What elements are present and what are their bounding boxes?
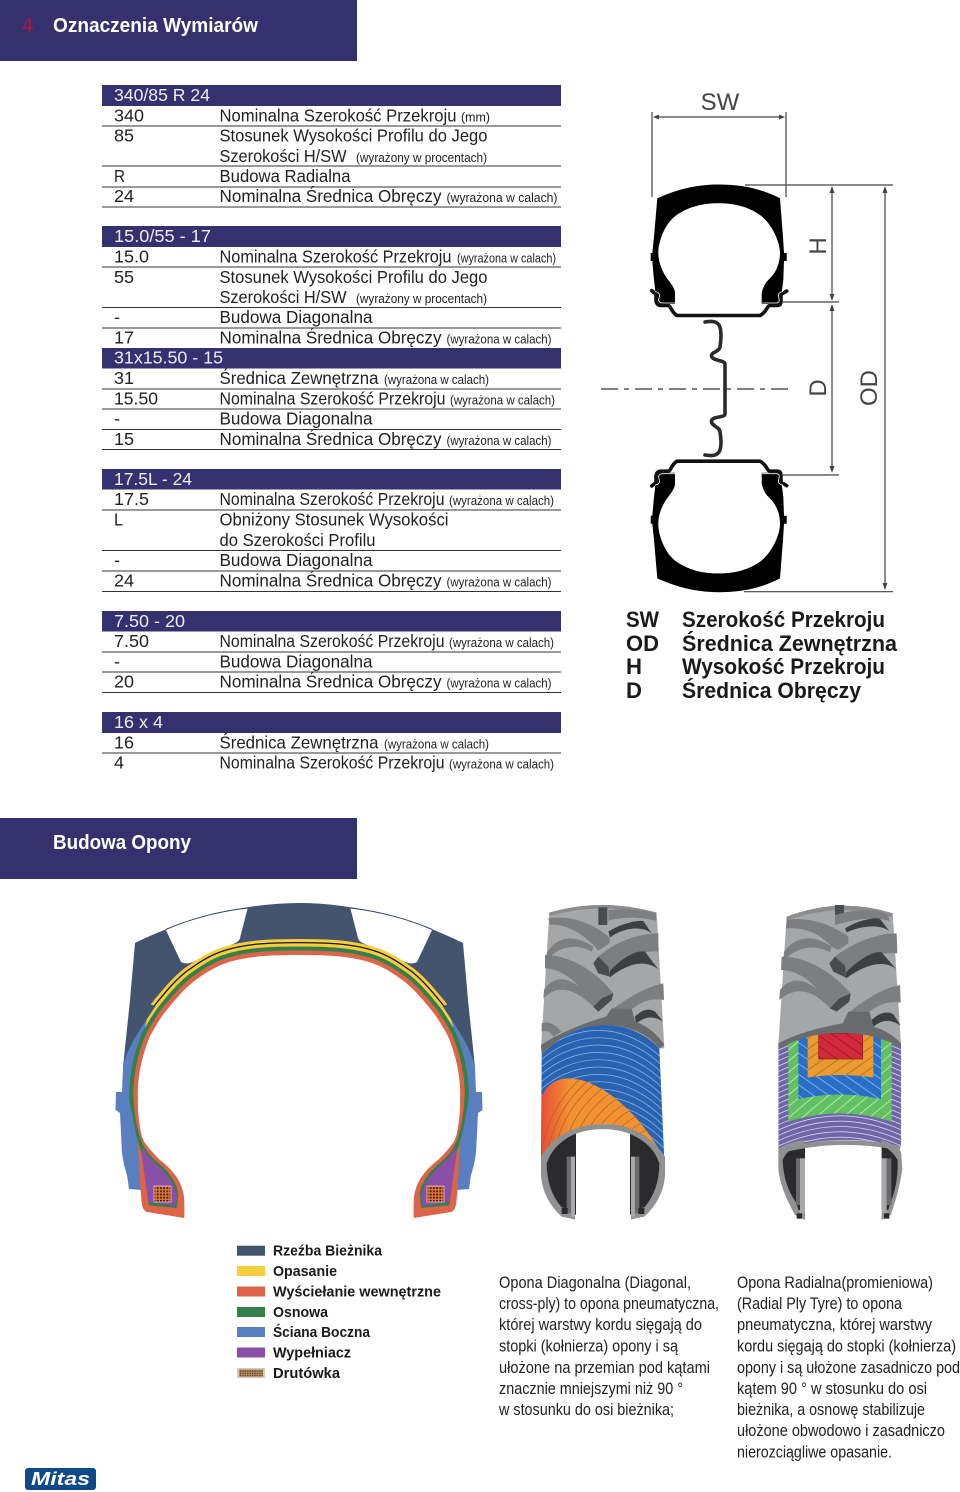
size table: 16 x 4: 16 x 4: [114, 712, 163, 732]
D dimension: D: [805, 379, 832, 397]
text: Opona Radialna: bieżnika, a osnowę stabilizuje: [737, 1400, 925, 1419]
diagonal tyre cutaway: [540, 905, 666, 1220]
bead wire: [154, 1186, 172, 1202]
logo: Mitas: [25, 1468, 96, 1490]
crown band and hub: [778, 1012, 901, 1050]
size table: 340/85 R 24: (wyrażony w procentach): [356, 151, 487, 165]
dimension key: H: [626, 654, 642, 679]
size table: 17.5L - 24: L: [114, 510, 123, 530]
radial tyre cutaway: [775, 905, 905, 1220]
size table: 17.5L - 24: Obniżony Stosunek Wysokości: [220, 510, 448, 530]
dimension key: [626, 607, 898, 703]
text: Opona Radialna: (Radial Ply Tyre) to opona: [737, 1294, 902, 1313]
size table: 7.50 - 20: (wyrażona w calach): [449, 636, 554, 650]
text: Opona Diagonalna: stopki (kołnierza) opony i są: [499, 1336, 678, 1356]
size table: 340/85 R 24: Budowa Radialna: [220, 166, 351, 186]
size table: 17.5L - 24: Budowa Diagonalna: [220, 550, 373, 570]
section band: Oznaczenia Wymiarów: Oznaczenia Wymiarów: [53, 15, 258, 37]
size table: 17.5L - 24: do Szerokości Profilu: [220, 530, 376, 550]
size table: 17.5L - 24: (wyrażona w calach): [446, 576, 552, 590]
legend: tyre components: Rzeźba Bieżnika: [273, 1242, 383, 1260]
size table: 16 x 4: 4: [114, 752, 124, 772]
size table: 15.0/55 - 17: [102, 226, 561, 348]
size table: 340/85 R 24: Stosunek Wysokości Profilu do Jego: [220, 126, 488, 146]
D dimension: [782, 304, 839, 475]
size table: 15.0/55 - 17: -: [114, 307, 120, 327]
carcass ring: [138, 955, 299, 1096]
size table: 17.5L - 24: Nominalna Szerokość Przekroju: [220, 489, 444, 509]
size table: 31x15.50 - 15: -: [114, 408, 120, 428]
size table: 340/85 R 24: Szerokości H/SW: [220, 146, 347, 166]
belt: [152, 955, 299, 1033]
size table: 31x15.50 - 15: 31x15.50 - 15: [114, 348, 223, 368]
dimension key: Średnica Obręczy: [682, 678, 862, 703]
wheel disc profile: [705, 321, 725, 456]
legend: tyre components: Drutówka: [273, 1365, 341, 1382]
size table: 340/85 R 24: (mm): [461, 110, 490, 124]
size table: 15.0/55 - 17: Budowa Diagonalna: [220, 307, 373, 327]
left bead: [778, 1140, 805, 1220]
size table: 17.5L - 24: [102, 469, 561, 592]
tread covering belt end: [130, 1003, 156, 1034]
size table: 17.5L - 24: 17.5: [114, 489, 149, 509]
text: Opona Diagonalna: której warstwy kordu sięgają do: [499, 1315, 702, 1334]
text: Opona Diagonalna: cross-ply) to opona pneumatyczna,: [499, 1294, 719, 1313]
size table: 15.0/55 - 17: (wyrażona w calach): [446, 332, 552, 346]
tread lugs: [542, 907, 664, 1037]
section band: Budowa Opony: Budowa Opony: [53, 832, 192, 854]
steel belt line: [161, 955, 299, 1018]
section band: Oznaczenia Wymiarów: [0, 0, 357, 61]
text: Opona Diagonalna: Opona Diagonalna (Diagonal,: [499, 1273, 691, 1292]
inner ring: [544, 1127, 662, 1157]
dimension key: Średnica Zewnętrzna: [682, 631, 898, 656]
size table: 31x15.50 - 15: 15: [114, 429, 134, 449]
H dimension: H: [805, 237, 832, 255]
text: Opona Diagonalna: w stosunku do osi bieżnika;: [498, 1400, 674, 1419]
size table: 16 x 4: Średnica Zewnętrzna: [220, 732, 379, 752]
size table: 15.0/55 - 17: (wyrażony w procentach): [356, 292, 487, 306]
size table: 7.50 - 20: -: [114, 652, 120, 672]
legend: tyre components: Wyściełanie wewnętrzne: [273, 1284, 441, 1300]
inner liner ring: [138, 955, 299, 1096]
blue ply: [798, 1037, 881, 1099]
orange ply: [541, 1078, 658, 1156]
OD dimension: [744, 186, 893, 592]
size table: 340/85 R 24: Nominalna Średnica Obręczy: [220, 185, 442, 206]
size table: 16 x 4: (wyrażona w calach): [449, 758, 554, 772]
size table: 16 x 4: 16: [114, 732, 134, 752]
size table: 340/85 R 24: [102, 85, 561, 207]
bead filler: [142, 1147, 177, 1206]
purple ply: [778, 1038, 901, 1150]
logo: Mitas: Mitas: [31, 1469, 90, 1489]
size table: 17.5L - 24: (wyrażona w calach): [449, 494, 554, 508]
size table: 15.0/55 - 17: (wyrażona w calach): [457, 252, 556, 266]
text: Opona Radialna: kątem 90 ° w stosunku do osi: [737, 1379, 927, 1398]
section band: Oznaczenia Wymiarów: 4: [22, 15, 34, 37]
text: Opona Diagonalna: ułożone na przemian pod kątami: [499, 1358, 710, 1377]
tread body: [541, 905, 664, 1048]
dimension key: Szerokość Przekroju: [682, 607, 885, 632]
size table: 15.0/55 - 17: 15.0/55 - 17: [114, 226, 211, 246]
outer arc line: [166, 908, 248, 930]
right bead: [630, 1130, 665, 1219]
dimension key: OD: [626, 631, 659, 656]
SW dimension: [652, 89, 786, 197]
orange ply: [808, 1034, 873, 1078]
dimension key: SW: [626, 607, 659, 632]
size table: 340/85 R 24: 340/85 R 24: [114, 85, 210, 105]
size table: 31x15.50 - 15: Budowa Diagonalna: [220, 408, 373, 428]
inner liner at bead: [133, 1096, 184, 1218]
section band: Budowa Opony: [0, 818, 357, 879]
text: Opona Diagonalna: [498, 1273, 719, 1419]
bottom tyre profile: [651, 461, 787, 592]
size table: 31x15.50 - 15: (wyrażona w calach): [384, 373, 489, 387]
tread: [123, 903, 299, 1067]
size table: 17.5L - 24: 17.5L - 24: [114, 469, 192, 489]
size table: 7.50 - 20: Budowa Diagonalna: [220, 652, 373, 672]
size table: 31x15.50 - 15: (wyrażona w calach): [450, 394, 555, 408]
axis centre line: [601, 388, 790, 390]
text: Opona Diagonalna: znacznie mniejszymi niż 90 °: [499, 1379, 683, 1398]
size table: 31x15.50 - 15: [102, 348, 561, 450]
text: Opona Radialna: [737, 1273, 960, 1462]
size table: 7.50 - 20: Nominalna Szerokość Przekroju: [220, 631, 444, 651]
size table: 16 x 4: Nominalna Szerokość Przekroju: [220, 752, 444, 772]
size table: 7.50 - 20: 7.50: [114, 631, 149, 651]
size table: 7.50 - 20: Nominalna Średnica Obręczy: [220, 670, 442, 692]
inner ring: [780, 1143, 900, 1151]
tread lugs: [779, 905, 901, 1027]
size table: 31x15.50 - 15: (wyrażona w calach): [446, 434, 552, 448]
right bead: [882, 1140, 902, 1220]
dimension key: D: [626, 678, 642, 703]
top tyre profile: [651, 184, 787, 316]
size table: 15.0/55 - 17: Stosunek Wysokości Profilu do Jego: [220, 267, 488, 287]
size table: 340/85 R 24: 85: [114, 126, 134, 146]
mirrored half: [299, 903, 482, 1218]
legend: tyre components: Wypełniacz: [273, 1344, 351, 1362]
blue ply: [541, 1025, 664, 1156]
inner cavity: [138, 955, 299, 1098]
left bead: [541, 1130, 576, 1219]
text: Opona Radialna: pneumatyczna, której warstwy: [737, 1315, 932, 1334]
size table: 15.0/55 - 17: Nominalna Szerokość Przekroju: [220, 246, 452, 266]
text: Opona Radialna: nierozciągliwe opasanie.: [737, 1442, 892, 1462]
size table: 31x15.50 - 15: Średnica Zewnętrzna: [220, 367, 379, 388]
legend: tyre components: [237, 1242, 441, 1382]
legend: tyre components: Osnowa: [273, 1304, 329, 1321]
dimension diagram: tyre cross-section on rim: [601, 89, 893, 592]
size table: 31x15.50 - 15: Nominalna Szerokość Przekroju: [220, 388, 446, 408]
size table: 31x15.50 - 15: 15.50: [114, 388, 158, 408]
belt inner part: [152, 955, 299, 1033]
size table: 16 x 4: (wyrażona w calach): [384, 738, 489, 752]
legend: tyre components: Ściana Boczna: [273, 1323, 371, 1341]
size table: 7.50 - 20: 20: [114, 672, 134, 692]
size table: 15.0/55 - 17: 15.0: [114, 246, 149, 266]
size table: 7.50 - 20: [102, 611, 561, 692]
size table: 17.5L - 24: -: [114, 550, 120, 570]
carcass at bead: [129, 1096, 178, 1208]
size table: 15.0/55 - 17: Nominalna Średnica Obręczy: [220, 326, 442, 348]
size table: 15.0/55 - 17: 17: [114, 328, 134, 348]
green ply: [788, 1036, 892, 1122]
size table: 15.0/55 - 17: 55: [114, 267, 134, 287]
OD dimension: OD: [856, 370, 883, 406]
size table: 16 x 4: [102, 712, 561, 772]
sidewall: [116, 1007, 155, 1190]
tread body: [778, 906, 901, 1045]
size table: 17.5L - 24: 24: [114, 570, 134, 590]
size table: 340/85 R 24: Nominalna Szerokość Przekroju: [220, 106, 456, 126]
legend: tyre components: Opasanie: [273, 1263, 337, 1280]
size table: 340/85 R 24: 24: [114, 186, 134, 206]
size table: 31x15.50 - 15: 31: [114, 368, 134, 388]
SW dimension: SW: [701, 89, 740, 116]
size table: 17.5L - 24: Nominalna Średnica Obręczy: [220, 570, 442, 590]
H dimension: [745, 185, 893, 302]
red ply: [819, 1033, 863, 1059]
size table: 340/85 R 24: (wyrażona w calach): [446, 191, 558, 205]
size table: 340/85 R 24: R: [114, 166, 125, 186]
crown band and hub: [541, 1008, 664, 1055]
size table: 7.50 - 20: (wyrażona w calach): [446, 676, 552, 690]
size table: 15.0/55 - 17: Szerokości H/SW: [220, 287, 347, 307]
dimension key: Wysokość Przekroju: [682, 654, 885, 679]
tyre construction cross-section: [116, 903, 482, 1218]
size table: 340/85 R 24: 340: [114, 106, 144, 126]
tread groove: [166, 908, 248, 964]
size table: 7.50 - 20: 7.50 - 20: [114, 611, 185, 631]
size table: 31x15.50 - 15: Nominalna Średnica Obręczy: [220, 428, 442, 449]
